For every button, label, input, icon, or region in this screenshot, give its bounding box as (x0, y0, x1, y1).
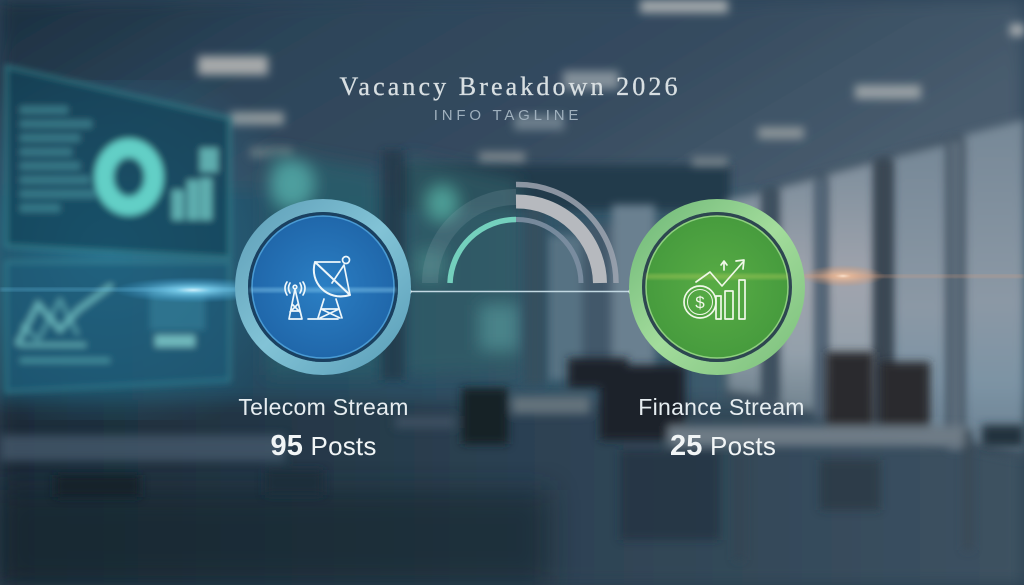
office furniture (0, 352, 1024, 560)
screen panel top (6, 66, 230, 258)
icon: coin, bars and rising arrow (684, 260, 745, 319)
screen panel lower (6, 262, 230, 392)
label: finance stream: Finance Stream (638, 394, 805, 420)
ceiling lights (198, 0, 1024, 166)
left glass screens glow (0, 80, 310, 420)
icon: coin, bars and rising arrow: $ (695, 293, 705, 312)
panel: finance stream (636, 206, 805, 462)
dark columns (382, 140, 963, 450)
semicircular arc gauge (430, 184, 616, 283)
panel: telecom stream (238, 206, 409, 462)
value: 95 posts: 95 Posts (270, 430, 377, 462)
icon: satellite dish and antenna tower (285, 256, 350, 319)
telecom badge (242, 206, 404, 368)
windows (547, 118, 1024, 460)
screen panels centre (268, 150, 520, 375)
light flare: orange (800, 265, 1024, 287)
light flare: blue (0, 277, 330, 303)
label: telecom stream: Telecom Stream (238, 394, 409, 420)
tagline: INFO TAGLINE (434, 107, 582, 124)
value: 25 posts: 25 Posts (670, 430, 776, 462)
finance badge (636, 206, 798, 368)
back wall dark band (400, 165, 730, 210)
connector line (404, 288, 636, 295)
title: Vacancy Breakdown 2026 (339, 72, 681, 101)
